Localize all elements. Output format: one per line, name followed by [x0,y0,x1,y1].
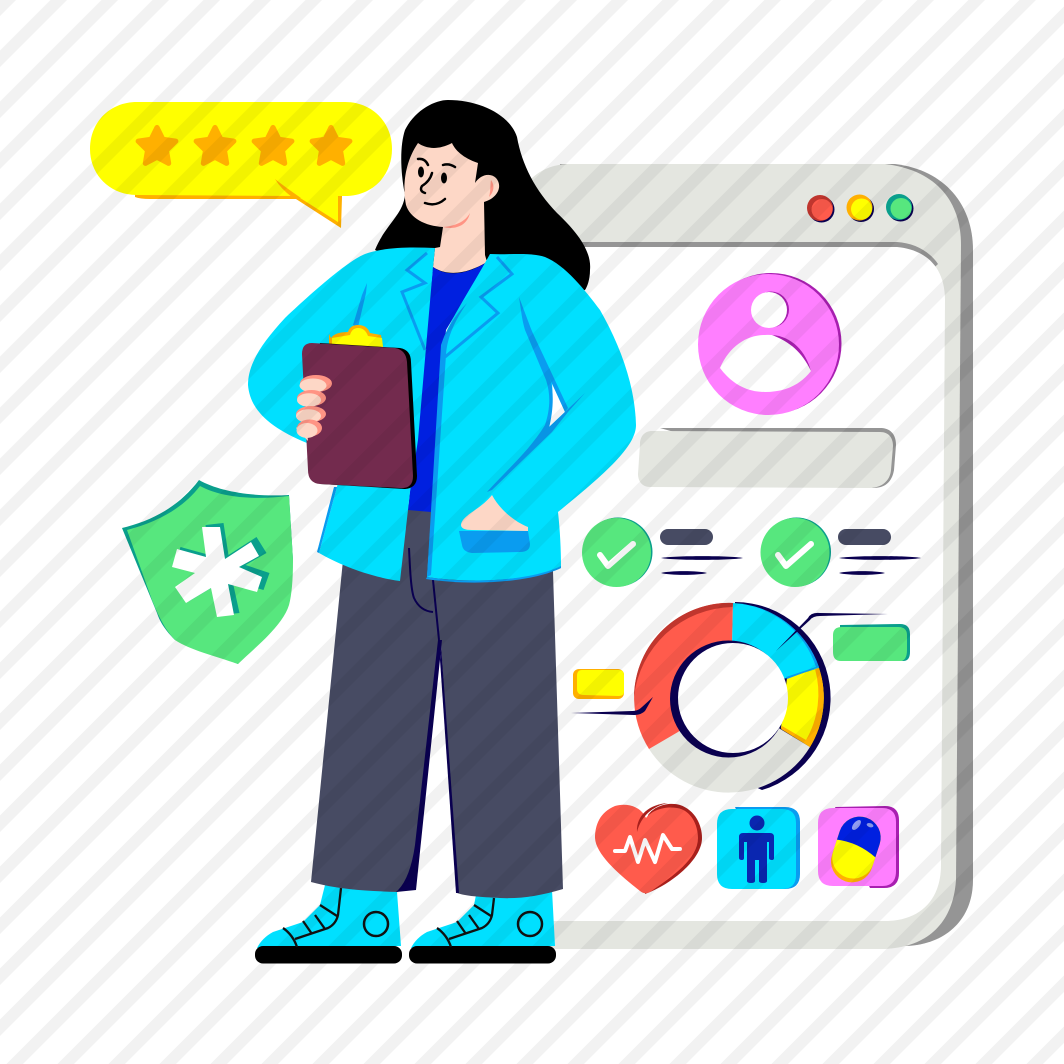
icon: profile avatar [698,273,842,415]
coat seams [402,253,512,357]
name field placeholder [638,428,896,488]
hair [375,100,590,300]
segment edge: blue [740,604,819,679]
window control dots [807,194,914,222]
trousers [311,505,563,898]
coat left side [248,248,435,581]
speech bubble with rating [90,102,392,228]
figure: doctor [248,100,636,964]
icon: heart with pulse [595,803,702,894]
rating stars [138,128,350,163]
segment edge: orange [781,668,824,747]
leader line: left [571,697,653,715]
lab coat [248,248,636,583]
hand in pocket [459,495,530,553]
segment: cyan [731,603,819,690]
icon: person tile [717,807,800,889]
panel: app window [500,164,973,949]
legend chip: green [833,624,910,661]
leader line: right [776,613,888,651]
segment: yellow [781,668,824,747]
chart: donut with four segments [571,602,910,793]
shirt [408,262,487,512]
asterisk [172,523,270,617]
check item: right [760,518,921,587]
clipboard [302,325,417,489]
segment edge: dark red [634,603,733,697]
arm gap [548,382,565,428]
face and neck [404,143,499,273]
icon: capsule tile [818,806,899,888]
check item: left [582,518,743,587]
shield icon with asterisk [122,480,293,664]
segment: red [634,603,733,749]
segment: grey [649,698,810,793]
boots [255,885,556,964]
legend chip: yellow [573,669,624,699]
coat right side [427,254,636,580]
fingers holding clipboard [296,375,332,441]
